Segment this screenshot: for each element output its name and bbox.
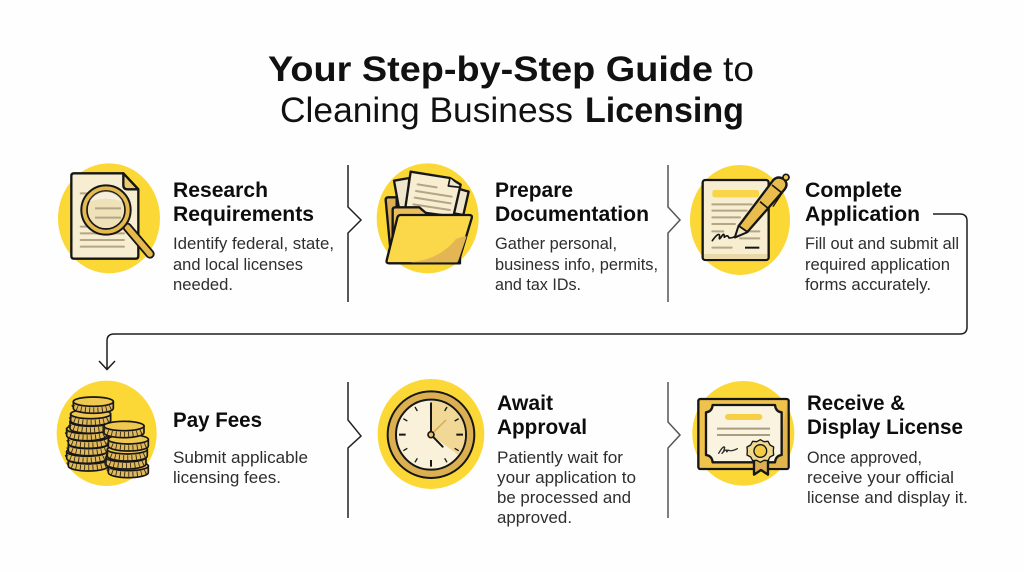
text block: Once approved, xyxy=(807,449,922,467)
text block xyxy=(495,235,658,294)
text block: needed. xyxy=(173,276,233,294)
icon: application form with pen xyxy=(690,165,790,275)
text block: Identify federal, state, xyxy=(173,235,334,253)
title: Your Step-by-Step Guide xyxy=(268,50,713,89)
icon: clock xyxy=(378,379,484,489)
text block: Submit applicable xyxy=(173,449,308,467)
panel: step 4 pay fees xyxy=(57,381,308,487)
text block: and tax IDs. xyxy=(495,276,581,294)
text block: required application xyxy=(805,256,950,274)
panel: step 3 complete application xyxy=(690,165,959,294)
heading: Complete xyxy=(805,178,902,202)
panel: step 6 receive and display license xyxy=(692,381,968,507)
text block xyxy=(805,235,959,294)
heading: Research xyxy=(173,178,268,202)
title: Licensing xyxy=(585,91,744,130)
text block xyxy=(497,449,636,527)
text block: Gather personal, xyxy=(495,235,617,253)
text block: licensing fees. xyxy=(173,469,281,487)
arrow: divider 5 to 6 xyxy=(668,382,680,518)
arrow: divider 1 to 2 xyxy=(348,165,361,302)
heading xyxy=(807,391,963,439)
panel: step 2 prepare documentation xyxy=(377,163,658,294)
heading: Requirements xyxy=(173,202,314,226)
heading xyxy=(497,391,587,439)
heading: Receive & xyxy=(807,391,905,415)
text block xyxy=(807,449,968,507)
heading: Pay Fees xyxy=(173,408,262,432)
icon: framed certificate with seal xyxy=(692,381,794,486)
text block: Patiently wait for xyxy=(497,449,624,467)
heading: Approval xyxy=(497,415,587,439)
panel: step 5 await approval xyxy=(378,379,636,527)
text block: receive your official xyxy=(807,469,954,487)
heading: Prepare xyxy=(495,178,573,202)
arrow: divider 4 to 5 xyxy=(348,382,361,518)
text block: Fill out and submit all xyxy=(805,235,959,253)
text block: approved. xyxy=(497,509,572,527)
text block xyxy=(173,449,308,487)
text block: business info, permits, xyxy=(495,256,658,274)
text block: forms accurately. xyxy=(805,276,931,294)
text block: and local licenses xyxy=(173,256,303,274)
icon: document with magnifying glass xyxy=(58,163,160,273)
text block: license and display it. xyxy=(807,489,968,507)
text block xyxy=(173,235,334,294)
heading: Application xyxy=(805,202,920,226)
heading: Documentation xyxy=(495,202,649,226)
text block: be processed and xyxy=(497,489,631,507)
icon: folder with documents xyxy=(377,163,479,273)
text block: your application to xyxy=(497,469,636,487)
heading xyxy=(173,178,314,226)
heading: Display License xyxy=(807,415,963,439)
icon: coin stacks xyxy=(57,381,157,486)
arrow: connector from row 1 to row 2 xyxy=(99,214,967,370)
title: to xyxy=(723,50,754,89)
panel: step 1 research requirements xyxy=(58,163,334,294)
arrow: divider 2 to 3 xyxy=(668,165,680,302)
title xyxy=(268,50,754,130)
heading: Await xyxy=(497,391,553,415)
heading xyxy=(805,178,920,226)
heading xyxy=(495,178,649,226)
title: Cleaning Business xyxy=(280,91,573,130)
